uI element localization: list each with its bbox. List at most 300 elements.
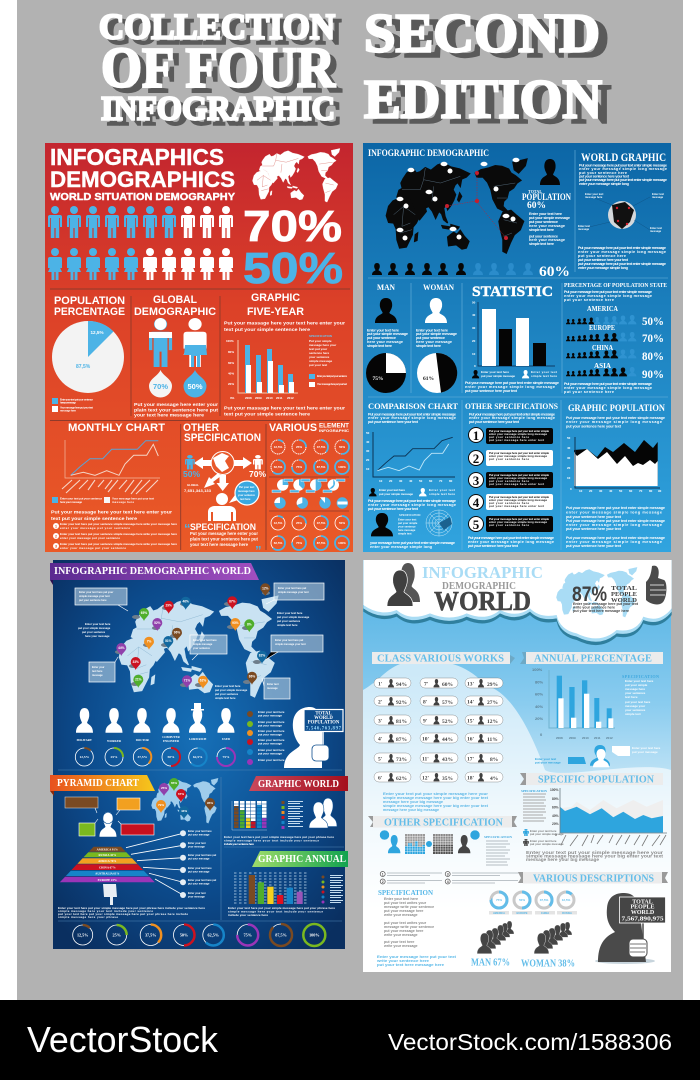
pyramid: CHINA 67% [99, 866, 116, 870]
area chart: 0 [570, 487, 572, 491]
graphic population section [566, 403, 665, 548]
big percentages [243, 202, 343, 293]
pyramid text [58, 906, 205, 919]
specification text block: put your message here [384, 929, 423, 933]
title foreground: EDITION [364, 68, 602, 130]
color legend: put your message [258, 742, 282, 746]
specification text block: Enter your text here [384, 897, 418, 901]
total population: simple text here [529, 228, 554, 232]
map pins: 65% [141, 611, 147, 615]
numbered boxes: 5 [473, 517, 480, 532]
ring charts gray blue: 50% [519, 898, 525, 902]
specification text block [376, 889, 457, 967]
map connection lines [447, 175, 506, 238]
sign board: 7,567,890,975 [622, 916, 664, 922]
numbered boxes: 4 [473, 495, 480, 510]
men crowd [477, 921, 514, 954]
title shadow [105, 8, 611, 134]
other specification section: OTHER [183, 422, 219, 434]
globe: message [578, 228, 590, 231]
class items grid: 12' [422, 776, 430, 782]
pyramid text: put your text here put your simple message here put your phrase here include [58, 912, 188, 916]
statistic legend [472, 370, 557, 378]
world graphic section: enter your message simple long message [578, 250, 666, 254]
five-year chart section: GRAPHIC [251, 292, 300, 304]
ring charts gray blue: 12,5% [562, 898, 571, 902]
pyramid: AMERICA 91% [97, 848, 118, 852]
map pins: 96% [174, 631, 180, 635]
color legend: put your message [258, 714, 282, 718]
ring charts gray blue: AMERICA [493, 911, 505, 915]
other specifications section: enter your message simple long message [469, 416, 555, 420]
plain map notes: Enter your text here [215, 684, 241, 688]
area chart: 70 [639, 489, 643, 493]
blue panel heading: INFOGRAPHIC DEMOGRAPHIC [368, 148, 489, 158]
annual specification text: simple text [625, 712, 641, 716]
line chart [62, 440, 160, 494]
87 percent text: write your sentence here [572, 606, 615, 610]
annual bar chart: 2011 [594, 736, 601, 740]
area chart: 90 [658, 489, 662, 493]
numbered boxes: put your sentence here [489, 501, 529, 505]
class items grid: 57% [442, 700, 453, 706]
population legend: Enter your text here [530, 839, 557, 843]
banner: class various works: CLASS VARIOUS WORKS [377, 654, 504, 664]
plain map notes: simple text here [277, 623, 298, 627]
comparison chart section: put your sentence here your text [368, 420, 419, 424]
annual specification text: Enter your text here [625, 679, 654, 683]
specification text: Enter your text put your sentence [317, 375, 348, 378]
statistic legend: put your simple message [481, 374, 515, 378]
specification text: text put your [309, 347, 328, 351]
comparison chart section: enter your message simple long [370, 545, 433, 549]
numbered notes: 3 [447, 872, 449, 876]
title shadow: SECOND [373, 8, 609, 68]
class section paragraph: message here your big message [383, 807, 440, 812]
bar chart: 20% [228, 382, 234, 386]
specification text block: put your message here [384, 909, 423, 913]
world graphic section: put your message here put your text enter simple message [579, 178, 667, 182]
pyramid leader lines: Enter your text here [188, 867, 212, 870]
profession icons: LORD RICH [189, 737, 207, 741]
total population: 60% [527, 200, 546, 210]
class items grid: 87% [396, 737, 407, 743]
profession icons: WORKER [107, 739, 122, 743]
five-year chart section [224, 292, 348, 418]
bottom ring charts: 75% [244, 932, 252, 938]
footer url: VectorStock.com/1588306 [388, 1029, 672, 1055]
small world map with pins: 65% [171, 781, 177, 785]
numbered boxes: put your sentence here [489, 435, 529, 439]
area chart: 30 [599, 489, 603, 493]
class items grid: 94% [396, 682, 407, 688]
globe: Enter text [652, 192, 664, 196]
map pins: 29% [166, 604, 172, 608]
title shadow: OF FOUR [107, 42, 342, 104]
map pins: 52% [154, 621, 161, 625]
bottom ring charts: 87,5% [275, 932, 287, 938]
annual bar chart: 2008 [556, 736, 563, 740]
color legend: Enter your text here [258, 729, 285, 733]
graphic population section: put your sentence here your text [566, 424, 622, 428]
class items grid: 17' [467, 756, 474, 762]
profession rings: 37,5% [137, 755, 148, 759]
specification quote: “ [184, 521, 190, 536]
world graphic section: put your message here put your text enter simple message [578, 262, 666, 266]
color legend: put your message [258, 732, 282, 736]
87 percent text: Enter your message here put your text [573, 602, 639, 606]
white figure [253, 455, 263, 469]
graphic population section: enter your message simple long message [566, 523, 662, 527]
annual bar chart [234, 873, 308, 904]
pie legend: Your message here put your text [60, 406, 93, 410]
speech bubble: your sentence [238, 494, 256, 497]
purple heading ribbon [50, 563, 259, 585]
various element section: 12,5% [274, 521, 283, 525]
class items grid: 16' [467, 736, 474, 742]
statistic bar chart: 20 [472, 339, 476, 343]
various element section: 25% [296, 521, 302, 525]
global text: Put your message here enter your [134, 402, 218, 408]
population state section: ASIA [594, 362, 611, 370]
bottom ring charts: 37,5% [145, 932, 156, 938]
world chart legend [282, 801, 303, 829]
numbered list: 1 [55, 524, 58, 528]
population paragraph: Enter your text put your simple message here your [526, 850, 663, 855]
globe [578, 192, 664, 233]
other specifications section: Put your message here put your text enter simple message [469, 412, 555, 416]
specification text [309, 334, 348, 387]
specification mini text [398, 513, 420, 536]
callout boxes: your sentence [193, 647, 211, 650]
class items grid: 11% [487, 737, 498, 743]
population state section: Put your message here put your text enter simple message [564, 382, 652, 386]
map pins: 8% [247, 622, 252, 626]
various element section: 100% [338, 541, 346, 545]
various element section: INFOGRAPHIC [319, 428, 349, 433]
callout boxes: Enter your text here put [275, 639, 303, 642]
plain map notes: put your sentence [82, 630, 106, 634]
graphic population section: put your sentence here your text [566, 527, 622, 531]
pyramid leader lines: Enter your text here put [188, 879, 216, 882]
specification mini text: your sentence [398, 524, 416, 528]
blue figure [185, 455, 195, 469]
specification text: Put your simple [309, 339, 332, 343]
various element section [269, 422, 349, 550]
comparison chart section: 20 [389, 479, 393, 483]
graphic population section: put your sentence here your text [566, 544, 622, 548]
comparison chart section: your message here put your text enter simple message [370, 541, 455, 545]
banner: specific population: SPECIFIC POPULATION [538, 774, 655, 786]
area chart: 40 [567, 446, 571, 450]
population paragraph: message here your big message [526, 857, 600, 862]
specific population area chart: 60% [552, 806, 559, 810]
specification text: simple message [309, 359, 333, 363]
plain map notes: put your simple message [78, 626, 111, 630]
annual bar chart: 80% [535, 680, 543, 684]
world graphic section: WORLD GRAPHIC [581, 150, 666, 164]
class items grid: 8% [490, 757, 498, 763]
monthly chart section: text put your simple sentence here [51, 516, 137, 522]
man and woman percentages: MAN 67% [471, 958, 510, 968]
global demographic section: DEMOGRAPHIC [134, 306, 216, 318]
comparison chart section: COMPARISON CHART [368, 401, 458, 411]
total population: put your sentence [529, 234, 558, 238]
ring charts gray blue: 37,5% [540, 898, 549, 902]
numbered boxes: enter your message simple long message [489, 520, 547, 524]
world map light blue [557, 568, 637, 617]
pyramid chart ribbon [50, 775, 155, 796]
callout boxes: put your sentence here [79, 599, 107, 602]
big percentages: 50% [243, 244, 343, 293]
woman column: here your message [416, 340, 452, 344]
comparison chart section: 30 [366, 449, 370, 453]
87 percent text [572, 583, 639, 613]
specification text: SPECIFICATION [309, 334, 332, 338]
specification text block: Enter your message here put your text [377, 954, 457, 959]
specification text block: put your text here [384, 940, 414, 944]
numbered list: Enter your text here put your sentence simple message here write your message here [60, 542, 177, 546]
population legend: put your simple message [530, 842, 564, 846]
numbered boxes: enter your message simple long message [489, 476, 547, 480]
plain map notes: simple text here [215, 696, 236, 700]
class items grid: 29% [487, 682, 498, 688]
map pins: 87% [229, 599, 236, 603]
monthly chart section: MONTHLY CHART [68, 422, 165, 434]
other specification section: 70% [249, 470, 266, 479]
numbered notes: 4 [447, 880, 449, 884]
population paragraph [526, 850, 664, 862]
callout boxes: Enter your text here put [278, 587, 306, 590]
world graphic section: Put your message here put your text enter simple message [578, 246, 666, 250]
various element section: 50% [339, 521, 345, 525]
monthly chart section [51, 422, 177, 550]
pyramid leader lines: put your message [188, 858, 210, 860]
blue person with bubble [380, 830, 400, 853]
numbered boxes: enter your message simple long message [489, 454, 547, 458]
man column: MAN [377, 283, 395, 292]
various element section: 12,5% [274, 445, 283, 449]
various element section: 50% [339, 445, 345, 449]
class items grid: 35% [442, 776, 453, 782]
other specification section: SPECIFICATION [184, 432, 261, 444]
population paragraph: simple message message here your big enter your text [526, 854, 664, 858]
pie legend: message here [60, 408, 77, 412]
total population [522, 159, 571, 246]
population state section: 80% [642, 349, 664, 363]
specification text block: write your message [383, 933, 418, 937]
total population: here your message [529, 238, 565, 242]
color legend: Enter your text here [258, 748, 285, 752]
thumb up icon [646, 566, 666, 604]
pyramid leader lines: put your message [188, 882, 210, 886]
world map light [119, 596, 278, 697]
annual bar chart: 2010 [582, 736, 589, 740]
plain map notes: here your message [85, 634, 110, 638]
population state section: enter your message simple long message [564, 294, 652, 298]
specific population area chart: 80% [552, 797, 559, 801]
pyramid leader lines: Enter your text here put [188, 854, 216, 857]
globe: message [650, 230, 662, 233]
pyramid leader lines: Enter your text here [188, 830, 212, 833]
population percentage section: PERCENTAGE [54, 306, 125, 318]
total population: simple text here [529, 242, 554, 246]
callout boxes: Enter text [267, 683, 279, 686]
area chart: 40 [609, 489, 613, 493]
profession rings: 75% [222, 755, 230, 759]
dark person with bubble [458, 830, 480, 853]
callout boxes: simple message [193, 643, 213, 646]
two people white icon [309, 798, 337, 828]
world graphic section: put your sentence here your text [579, 174, 630, 178]
bar chart: 2010 [266, 396, 273, 400]
world graphic section: enter your message simple long [578, 266, 629, 270]
specification mini text: here message [398, 528, 416, 532]
numbered notes: 1 [382, 872, 384, 876]
numbered boxes: 1 [473, 428, 479, 443]
map markers [396, 158, 520, 240]
map pins: 71% [184, 678, 190, 682]
monthly legend: Enter your text put your sentence [60, 496, 102, 500]
total population: here your message [529, 224, 565, 228]
speaker figure [208, 493, 236, 521]
light panel title: INFOGRAPHIC [422, 563, 543, 582]
ring charts gray blue [489, 892, 577, 915]
comparison chart section: Put your message here put your text enter simple message [368, 499, 456, 503]
bar chart: 0% [230, 396, 235, 400]
specification mini text: SPECIFICATION [399, 513, 420, 517]
man column: simple text here [367, 344, 392, 348]
woman column: WOMAN [423, 283, 454, 292]
specific population area chart: 0 [555, 833, 557, 837]
woman column: Enter your text here [416, 328, 448, 332]
numbered boxes: put your message here enter text [489, 438, 544, 442]
comparison chart section: 60 [429, 479, 433, 483]
various element section: 87,5% [317, 465, 326, 469]
graphic population section: Put your message here put your text enter simple message [566, 416, 665, 420]
statistic bar chart: 30 [472, 326, 476, 330]
annual specification text: your sentence [625, 708, 646, 712]
callout boxes: simple message your text [275, 643, 306, 646]
man column: Enter your text here [367, 328, 399, 332]
comparison chart section: Put your message here put your text enter simple message [368, 412, 456, 416]
comparison chart section [366, 401, 458, 549]
callout boxes: simple message your text [79, 595, 110, 598]
dark people icon [387, 563, 420, 606]
various element section: ELEMENT [319, 424, 349, 430]
bar chart: 80% [228, 350, 234, 354]
population state section: 50% [642, 314, 664, 328]
area chart: 80 [649, 489, 653, 493]
comparison chart section: 40 [409, 479, 413, 483]
comparison chart section: 20 [366, 458, 370, 462]
plain map notes: Enter your text here [85, 622, 111, 626]
profession rings: 12,5% [79, 755, 90, 759]
numbered list [53, 522, 177, 550]
total population: put your sentence [529, 220, 558, 224]
speech bubble: Put your text [239, 486, 254, 489]
title shadow: EDITION [373, 74, 611, 134]
numbered list: 2 [55, 534, 58, 538]
class items grid: 11' [422, 756, 429, 762]
pale background clouds [363, 660, 671, 972]
class section paragraph: Enter your text put your simple message here your [383, 791, 488, 796]
title foreground: COLLECTION [99, 6, 335, 46]
profession icons: ENGINEER [163, 739, 180, 743]
pie legend: here your message [60, 400, 77, 404]
global text [134, 402, 218, 418]
people row 60 percent: 60% [539, 264, 570, 280]
red panel heading: DEMOGRAPHICS [50, 167, 235, 192]
class items grid: 4% [490, 776, 498, 782]
population state section: AMERICA [587, 305, 618, 313]
globe: Enter text [578, 224, 590, 228]
bar chart [226, 339, 298, 400]
class items grid [374, 678, 503, 782]
pie legend [52, 398, 94, 412]
annual specification text: message here [625, 687, 645, 691]
man column: put your simple message [367, 332, 408, 336]
global demographic section: GLOBAL [153, 294, 197, 306]
area chart: 20 [567, 466, 571, 470]
title foreground [99, 2, 602, 130]
annual bar chart [532, 667, 615, 740]
dot grid dark [433, 834, 453, 854]
panel: red infographic [45, 143, 353, 558]
area chart: 10 [567, 476, 571, 480]
sign board: WORLD [631, 910, 655, 916]
statistic section: put your sentence here your text [465, 389, 518, 393]
class section paragraph: simple message message here your big enter your text [383, 803, 489, 808]
pyramid leader lines: your message [188, 846, 205, 848]
man column [366, 283, 408, 393]
specification text: Your message here put your text [317, 383, 347, 386]
comparison legend: Enter your text [429, 488, 455, 492]
population percentage section: POPULATION [54, 295, 125, 307]
class items grid: 62% [396, 776, 407, 782]
annual bar chart: 0 [540, 732, 543, 737]
radar chart [426, 510, 452, 536]
annual specification text: SPECIFICATION [622, 674, 659, 679]
other specifications section: enter your message simple long message [468, 540, 554, 544]
ring charts gray blue: 75% [496, 898, 502, 902]
total world population figure [284, 707, 343, 768]
87 percent text: PEOPLE [611, 591, 637, 598]
class section paragraph: message here your big message [383, 799, 444, 804]
numbered boxes: Put your message here put your text enter simple [489, 495, 549, 499]
pyramid: AFRICA 76% [98, 859, 116, 863]
comparison legend: simple text here [429, 492, 455, 496]
graphic population section: GRAPHIC POPULATION [568, 403, 665, 413]
man column: put your sentence [367, 336, 396, 340]
class items grid: 3' [378, 718, 383, 724]
other specification side text [484, 835, 512, 865]
map pins: 51% [165, 639, 172, 643]
woman column: put your sentence [416, 336, 445, 340]
numbered boxes: Put your message here put your text enter simple [489, 517, 549, 521]
bar chart: 2009 [255, 396, 262, 400]
monthly legend [52, 496, 154, 504]
map pins: 93% [232, 621, 239, 625]
class items grid: 60% [442, 682, 453, 688]
color legend: Enter your text here [258, 758, 285, 762]
annual bar chart: 60% [535, 692, 543, 696]
numbered boxes: put your sentence here [489, 457, 529, 461]
ring charts upper [271, 440, 349, 474]
numbered boxes: Put your message here put your text enter simple [489, 429, 549, 433]
world graphic section: put your sentence here your text [578, 258, 629, 262]
specification quote: Put your message here enter your [190, 531, 258, 536]
